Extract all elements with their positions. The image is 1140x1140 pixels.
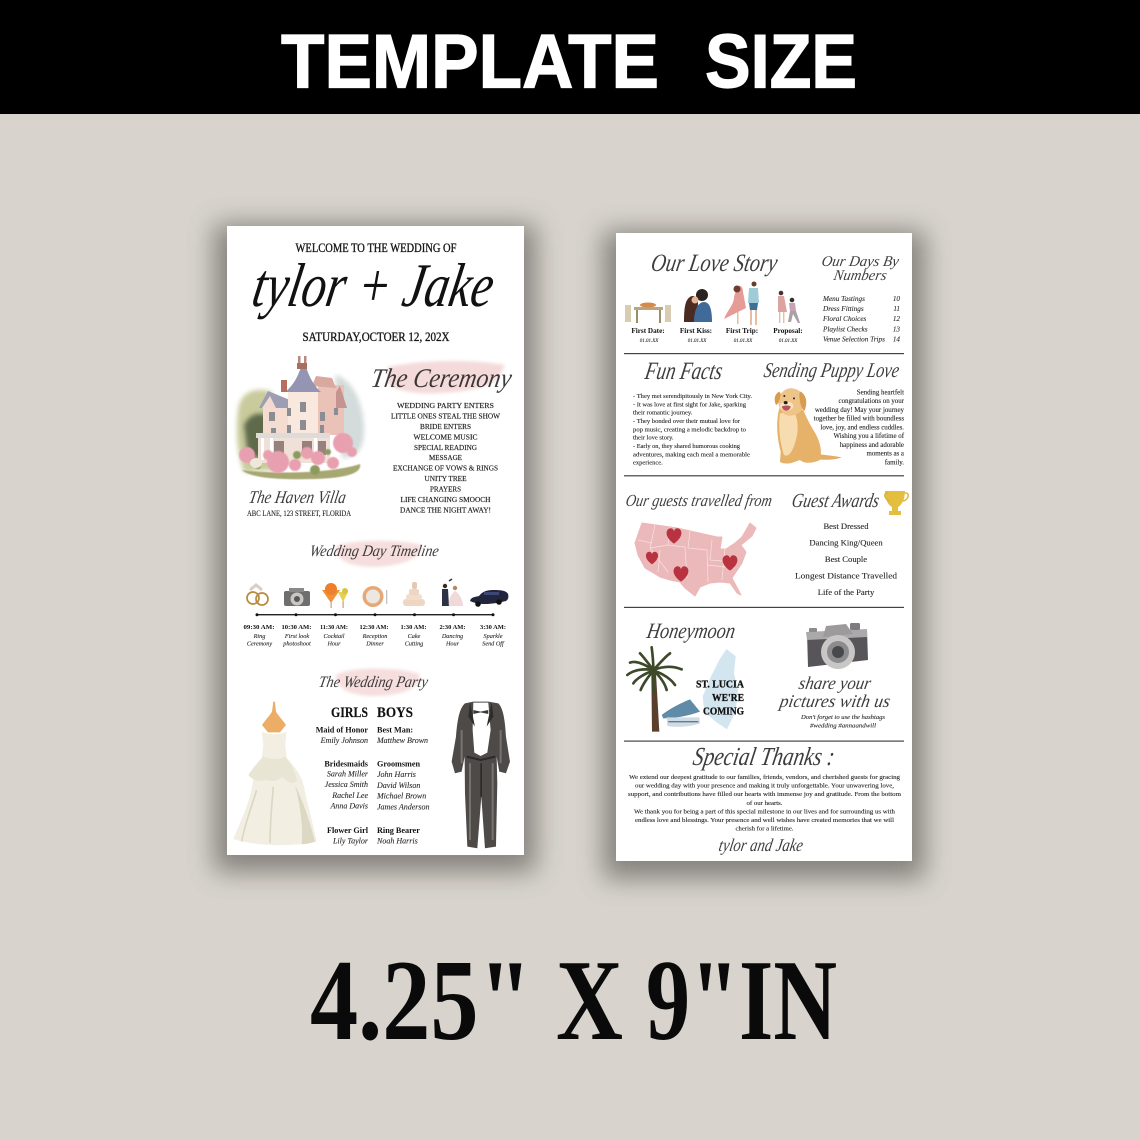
timeline labels: 3:30 AM: (480, 624, 506, 631)
timeline labels: Ceremony (247, 640, 272, 648)
thanks message: support, and contributions have filled our hearts with immense joy and gratitude. From the bottom (628, 791, 901, 798)
size label: 4.25" (310, 937, 532, 1064)
timeline labels: First look (284, 633, 309, 640)
thanks message: We extend our deepest gratitude to our families, friends, vendors, and cherished guests for gracing (629, 774, 901, 781)
timeline labels: 12:30 AM: (360, 624, 388, 631)
puppy message: together be filled with boundless (814, 416, 904, 423)
heading: our days by numbers: Our Days By (820, 254, 900, 270)
wedding party names: James Anderson (377, 802, 430, 812)
honeymoon label: ST. LUCIA (696, 680, 744, 690)
days by numbers list: 13 (893, 326, 900, 334)
days by numbers list: Venue Selection Trips (823, 336, 885, 344)
days by numbers list: Playlist Checks (822, 326, 868, 334)
shadow: right card (603, 231, 925, 879)
ceremony order list: DANCE THE NIGHT AWAY! (400, 506, 491, 514)
timeline labels: Cutting (405, 640, 423, 648)
guest awards list: Life of the Party (818, 587, 875, 597)
heading: guest awards: Guest Awards (790, 490, 881, 512)
wedding party names: Michael Brown (376, 792, 426, 800)
fun facts text: - They bonded over their mutual love for (633, 418, 741, 425)
wedding party names: Anna Davis (329, 802, 368, 810)
venue address: ABC LANE, 123 STREET, FLORIDA (247, 509, 351, 518)
timeline labels: Reception (362, 633, 387, 640)
right wing (318, 385, 344, 435)
map hearts (646, 528, 737, 582)
love story milestones: 01.01.XX (640, 339, 659, 344)
head (778, 388, 805, 416)
venue name: The Haven Villa (247, 487, 348, 507)
days by numbers list: Menu Tastings (822, 295, 865, 303)
thanks message: endless love and blessings. Your presence and well wishes have created memories that we will (635, 817, 894, 824)
heading: template size: SIZE (705, 20, 857, 104)
column heading: girls: GIRLS (331, 705, 368, 721)
shadow: left card (214, 224, 536, 872)
illustration: vintage camera (806, 623, 868, 669)
fun facts text (633, 393, 752, 467)
ceremony order list: LIFE CHANGING SMOOCH (400, 495, 491, 504)
love story milestones: 01.01.XX (734, 339, 753, 344)
timeline (244, 579, 508, 648)
honeymoon label: COMING (703, 706, 744, 718)
icon: camera (284, 588, 310, 606)
love story milestones: Proposal: (773, 327, 803, 335)
days by numbers list: 14 (893, 336, 900, 344)
heading: the ceremony: The Ceremony (369, 363, 515, 393)
icon: trophy (885, 491, 908, 515)
thanks message (628, 774, 901, 833)
size label: 9"IN (646, 937, 837, 1064)
love story milestones: First Trip: (726, 327, 758, 335)
fun facts text: pop music, creating a melodic backdrop to (633, 426, 746, 433)
timeline labels: Cocktail (324, 633, 345, 640)
ceremony order list: EXCHANGE OF VOWS & RINGS (393, 464, 498, 473)
wedding party names: Emily Johnson (320, 736, 368, 745)
face (780, 401, 793, 411)
timeline labels: photoshoot (282, 640, 311, 648)
header banner (0, 0, 1140, 114)
size label: X (556, 937, 623, 1064)
icon: cake (403, 582, 425, 606)
illustration: tickets (662, 699, 700, 727)
days by numbers list (822, 295, 900, 344)
body (777, 408, 821, 464)
ceremony order list: WELCOME MUSIC (414, 432, 478, 441)
ground (242, 464, 360, 479)
wedding party names (316, 705, 430, 846)
timeline labels: 09:30 AM: (244, 624, 274, 631)
brush: timeline (335, 541, 421, 567)
heading: fun facts: Fun Facts (642, 358, 725, 385)
brush: wedding party (336, 668, 419, 696)
wedding party names: Ring Bearer (377, 826, 420, 835)
wedding party names: Sarah Miller (327, 770, 369, 778)
thanks message: We thank you for being a part of this special milestone in our lives and for surrounding us with (634, 808, 896, 815)
days by numbers list: Dress Fittings (822, 305, 864, 313)
timeline labels: 11:30 AM: (320, 624, 348, 631)
ceremony order list: PRAYERS (430, 485, 461, 494)
love story milestones: 01.01.XX (779, 339, 798, 344)
wedding party names: Best Man: (377, 726, 413, 734)
fun facts text: - They met serendipitously in New York City. (633, 393, 752, 400)
timeline labels: Dancing (441, 633, 463, 640)
fun facts text: their love story. (633, 435, 674, 442)
illustration: proposal (778, 291, 800, 323)
share your pictures text: #wedding #annaandwill (810, 722, 876, 730)
icon: limousine (470, 590, 508, 607)
puppy message: moments as a (866, 451, 904, 458)
icon: cocktails (322, 583, 348, 608)
wedding party names: Matthew Brown (376, 736, 428, 745)
ceremony order list: WEDDING PARTY ENTERS (397, 401, 494, 410)
chart: us guest map (635, 523, 756, 596)
puppy message: Sending heartfelt (857, 390, 904, 396)
days by numbers list: 10 (893, 295, 900, 303)
timeline labels: Hour (445, 640, 460, 648)
guest awards list: Best Couple (825, 554, 867, 564)
ceremony order list (391, 401, 501, 514)
heading: special thanks: Special Thanks : (691, 742, 837, 771)
heading: our days by numbers: Numbers (831, 268, 888, 284)
guest awards list: Dancing King/Queen (809, 538, 883, 548)
welcome line: WELCOME TO THE WEDDING OF (296, 240, 456, 255)
days by numbers list: 11 (893, 305, 900, 313)
timeline labels: 10:30 AM: (282, 624, 312, 631)
share your pictures text: share your (797, 673, 874, 693)
illustration: victorian villa (237, 356, 364, 479)
guest awards list (795, 521, 898, 597)
timeline labels: 2:30 AM: (440, 624, 466, 631)
days by numbers list: Floral Choices (822, 315, 867, 323)
share your pictures text (776, 673, 892, 730)
illustration: st lucia island (703, 650, 737, 728)
thanks message: of our hearts. (746, 800, 783, 807)
honeymoon label: WE'RE (712, 693, 744, 704)
illustration: palm tree (627, 647, 682, 732)
ceremony order list: BRIDE ENTERS (420, 422, 471, 431)
wedding party names: Lily Taylor (332, 836, 369, 846)
timeline labels: Cake (408, 633, 421, 640)
puppy message: congratulations on your (839, 398, 905, 405)
illustration: trip couple (724, 282, 759, 325)
illustration: wedding dress (233, 702, 317, 845)
wedding party names: David Wilson (376, 781, 420, 790)
couple names: tylor + Jake (248, 250, 500, 320)
signature: tylor and Jake (717, 835, 805, 855)
puppy message: wedding day! May your journey (815, 407, 905, 414)
heading: our days by numbers (820, 254, 900, 284)
guest awards list: Longest Distance Travelled (795, 571, 898, 581)
love story milestones: First Date: (631, 327, 665, 335)
timeline labels (244, 624, 506, 648)
fun facts text: experience. (633, 460, 663, 467)
wedding party names: Groomsmen (377, 760, 421, 768)
tower (288, 390, 318, 435)
thanks message: our wedding day with your presence and making it truly unforgettable. Your unwavering love, (635, 783, 894, 790)
days by numbers list: 12 (893, 315, 900, 323)
panel: program front (227, 226, 524, 855)
share your pictures text: Don't forget to use the hashtags (800, 714, 886, 721)
love story milestones: First Kiss: (680, 327, 712, 335)
column heading: boys: BOYS (377, 705, 413, 721)
wedding party names: Rachel Lee (331, 791, 368, 800)
icon: rings (247, 585, 268, 605)
timeline axis (256, 613, 494, 616)
heading: template size: TEMPLATE (281, 20, 659, 104)
ears (775, 392, 806, 411)
brush: the ceremony (388, 361, 505, 393)
share your pictures text: pictures with us (776, 691, 892, 711)
ceremony order list: LITTLE ONES STEAL THE SHOW (391, 411, 501, 420)
illustration: golden puppy (775, 388, 842, 464)
heading: honeymoon: Honeymoon (644, 618, 737, 643)
honeymoon label (696, 680, 744, 718)
ceremony order list: MESSAGE (429, 453, 462, 462)
wedding party names: Flower Girl (327, 826, 369, 835)
timeline labels: 1:30 AM: (400, 624, 426, 631)
thanks message: cherish for a lifetime. (736, 826, 794, 833)
chest (779, 412, 798, 456)
ceremony order list: SPECIAL READING (414, 443, 477, 452)
puppy message: happiness and adorable (840, 442, 904, 449)
wedding party names: John Harris (377, 770, 416, 779)
timeline labels: Ring (253, 633, 265, 640)
illustration: kiss (684, 289, 712, 322)
puppy message: love, joy, and endless cuddles. (820, 424, 904, 432)
love story milestones (631, 327, 803, 344)
timeline labels: Sparkle (484, 633, 503, 640)
fun facts text: adventures, making each meal a memorable (633, 451, 750, 458)
wedding party names: Maid of Honor (316, 726, 368, 734)
wedding party names: Noah Harris (376, 836, 418, 846)
porch (258, 433, 330, 463)
illustration: tuxedo (452, 702, 510, 848)
timeline labels: Hour (326, 640, 341, 648)
heading: our guests travelled from: Our guests travelled from (624, 491, 774, 510)
heading: wedding day timeline: Wedding Day Timeline (308, 543, 440, 560)
icon: plate (362, 586, 387, 607)
heading: sending puppy love: Sending Puppy Love (762, 358, 901, 382)
heading: our love story: Our Love Story (649, 250, 780, 277)
timeline labels: Send Off (482, 640, 505, 648)
tail (817, 454, 842, 460)
guest awards list: Best Dressed (823, 521, 869, 531)
fun facts text: - It was love at first sight for Jake, sparking (633, 401, 747, 408)
fun facts text: - Early on, they shared humorous cooking (633, 443, 741, 450)
love story milestones: 01.01.XX (688, 339, 707, 344)
size label (310, 937, 837, 1064)
date: SATURDAY,OCTOER 12, 202X (302, 329, 450, 344)
fun facts text: their romantic journey. (633, 410, 693, 417)
ceremony order list: UNITY TREE (424, 474, 467, 483)
flowering shrubs (239, 433, 357, 473)
panel: program back (616, 233, 912, 861)
left wing (263, 404, 289, 434)
puppy message (814, 390, 905, 466)
wedding party names: Jessica Smith (325, 780, 368, 789)
icon: dancing couple (442, 579, 463, 606)
windows (269, 402, 338, 434)
wedding party names: Bridesmaids (324, 760, 368, 768)
illustration: table (625, 302, 671, 323)
timeline labels: Dinner (365, 640, 384, 648)
heading: the wedding party: The Wedding Party (317, 674, 430, 691)
puppy message: family. (885, 460, 904, 466)
puppy message: Wishing you a lifetime of (833, 433, 905, 440)
